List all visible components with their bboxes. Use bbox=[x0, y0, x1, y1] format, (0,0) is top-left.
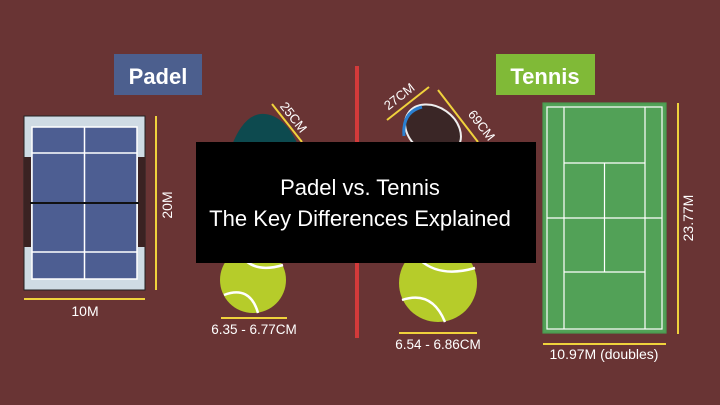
divider bbox=[355, 66, 359, 338]
tennis racket bbox=[381, 80, 498, 166]
title box bbox=[196, 142, 536, 263]
padel dims bbox=[24, 116, 175, 319]
title box: The Key Differences Explained bbox=[209, 206, 511, 231]
tennis racket: 69CM bbox=[465, 107, 498, 144]
title box: Padel vs. Tennis bbox=[280, 175, 440, 200]
padel label bbox=[114, 54, 202, 95]
tennis label bbox=[496, 54, 595, 95]
padel court bbox=[24, 116, 145, 290]
tennis dims: 10.97M (doubles) bbox=[550, 346, 658, 362]
padel ball: 6.35 - 6.77CM bbox=[211, 322, 297, 337]
tennis racket: 27CM bbox=[381, 80, 418, 113]
tennis ball: 6.54 - 6.86CM bbox=[395, 337, 481, 352]
tennis ball bbox=[395, 244, 481, 352]
padel dims: 10M bbox=[71, 303, 99, 319]
padel label: Padel bbox=[129, 64, 187, 89]
tennis dims: 23.77M bbox=[680, 195, 696, 241]
tennis label: Tennis bbox=[510, 64, 580, 89]
padel racket: 25CM bbox=[277, 99, 310, 136]
padel ball bbox=[211, 247, 297, 337]
tennis dims bbox=[543, 103, 696, 362]
padel dims: 20M bbox=[159, 191, 175, 219]
padel racket bbox=[232, 99, 310, 145]
tennis court bbox=[543, 103, 666, 333]
